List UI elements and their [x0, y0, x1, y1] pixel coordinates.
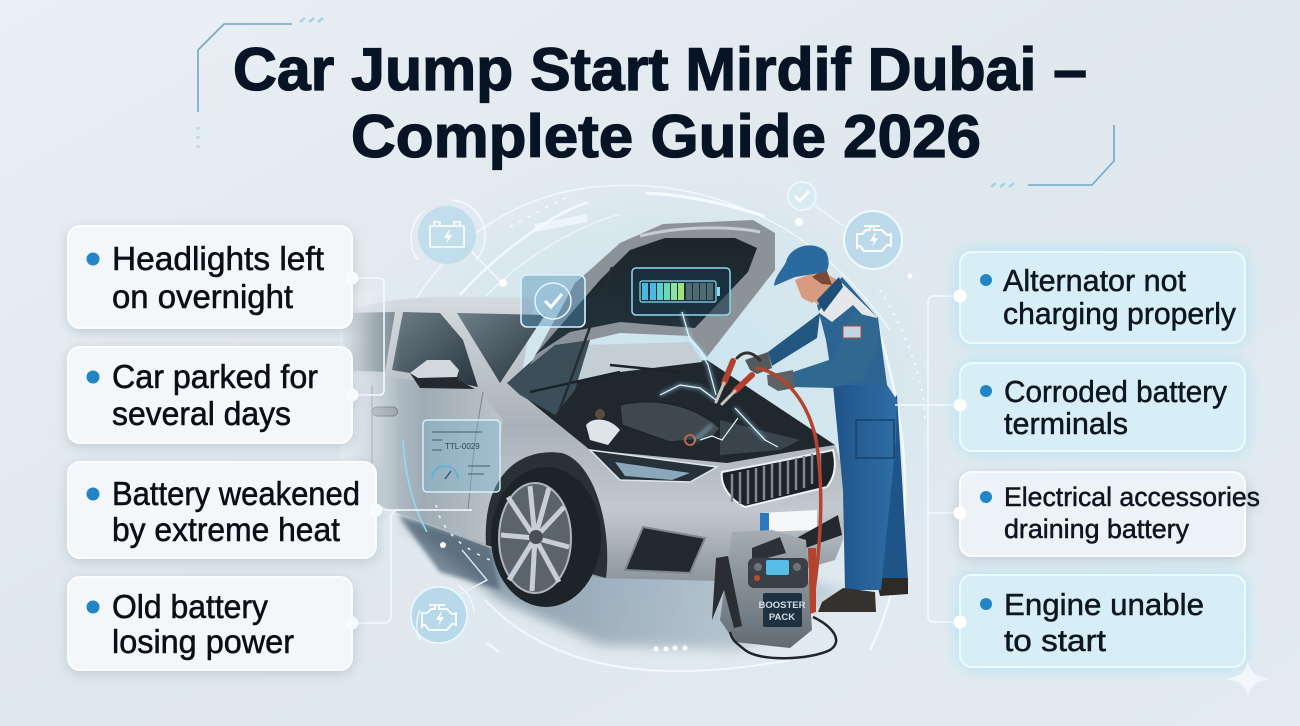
tyre [491, 467, 601, 607]
near leg [833, 385, 897, 590]
engine cover [620, 402, 720, 442]
cap [774, 245, 829, 286]
sill shadow [398, 515, 500, 590]
car [340, 220, 850, 650]
icon: sparkle [1226, 660, 1270, 698]
grille bars [732, 453, 820, 504]
title [233, 36, 1087, 170]
booster pack: PACK [769, 612, 795, 623]
torso [817, 277, 887, 385]
title: Car Jump Start Mirdif Dubai – [233, 36, 1087, 103]
panel: accessories: draining battery [1004, 514, 1189, 544]
dark hood glass [507, 340, 590, 415]
panel: corroded [954, 363, 1245, 451]
dashboard hud panel: TTL-0029 [445, 442, 480, 451]
booster pack [712, 530, 836, 658]
panel: headlights: on overnight [112, 278, 293, 315]
panel: engine unable [954, 575, 1245, 667]
door seam [372, 385, 483, 510]
door handle [372, 407, 398, 416]
open hood [530, 220, 775, 365]
panel: heat: by extreme heat [112, 511, 340, 548]
title frame: top left bracket [198, 18, 323, 148]
red handle [808, 548, 816, 614]
panel: heat [68, 462, 382, 558]
collar [817, 277, 843, 312]
mechanic [745, 245, 908, 612]
panel: accessories [954, 472, 1260, 556]
booster pack: BOOSTER [759, 600, 806, 611]
floor shadow [400, 520, 850, 650]
connector lines right [895, 296, 960, 622]
rim [499, 483, 571, 593]
title: Complete Guide 2026 [351, 103, 981, 170]
hood highlight [640, 228, 760, 236]
sleeve badge [843, 326, 861, 338]
connector lines left [352, 278, 472, 623]
far leg and boot [870, 395, 908, 580]
icon: engine warning badge bottom [411, 542, 487, 643]
panel: old battery [68, 577, 358, 670]
prop rod [557, 267, 612, 417]
icon: engine warning badge top right [844, 211, 912, 278]
black cable [730, 617, 836, 658]
panel: corroded: terminals [1004, 406, 1128, 441]
panel: alternator: charging properly [1003, 296, 1236, 331]
headlight [590, 450, 717, 482]
far arm [768, 313, 820, 366]
title frame: bottom right bracket [991, 125, 1114, 187]
panel: engine unable: to start [1004, 623, 1106, 658]
near arm [793, 312, 879, 388]
hud traces on door [403, 440, 490, 560]
panel: accessories: Electrical accessories [1004, 482, 1260, 512]
mirror [410, 360, 475, 389]
panel: alternator: Alternator not [1003, 263, 1186, 298]
lower air intake [625, 527, 705, 573]
hud arcs around the car [415, 185, 925, 671]
central glow [320, 140, 1000, 660]
hair [812, 268, 832, 285]
spokes [501, 486, 569, 591]
pack label [763, 593, 802, 627]
number plate [760, 510, 817, 532]
near boot [818, 588, 876, 612]
neck [808, 274, 838, 305]
coolant reservoir [586, 420, 620, 445]
battery hud on hood [632, 268, 730, 315]
far glove [745, 352, 772, 374]
near glove [767, 370, 795, 391]
panel: parked [68, 347, 358, 443]
face [795, 268, 829, 303]
pocket [856, 420, 894, 458]
dashboard hud panel [423, 420, 500, 492]
hood inner panel [535, 238, 757, 355]
clamps on pack [712, 556, 742, 628]
windshield [457, 313, 545, 383]
panel: corroded: Corroded battery [1004, 374, 1227, 409]
engine bay [510, 360, 835, 463]
panel: headlights: Headlights left [112, 240, 324, 277]
panel: engine unable: Engine unable [1004, 587, 1204, 622]
shoulder panel [818, 283, 877, 330]
left fade [340, 290, 400, 530]
car body [345, 297, 845, 582]
lightning core [660, 312, 778, 447]
panel: old battery: Old battery [112, 588, 268, 625]
light windshield under hood [565, 342, 702, 385]
panel: parked: Car parked for [112, 358, 318, 395]
jumper cables [716, 353, 821, 604]
icon: battery badge [411, 200, 507, 287]
small dots [654, 646, 688, 652]
door panels [345, 372, 503, 545]
side window [392, 312, 478, 387]
lightning sparks [660, 312, 765, 440]
wheel arch [486, 452, 607, 578]
panel: old battery: losing power [112, 623, 294, 660]
check hud panel [521, 275, 585, 327]
icon: small check badge [788, 182, 845, 227]
panel: heat: Battery weakened [112, 475, 360, 512]
panel: parked: several days [112, 395, 291, 432]
wiper blades [530, 365, 680, 392]
panel: alternator [954, 252, 1245, 343]
rear window [342, 312, 395, 372]
panel: headlights [68, 226, 358, 328]
grille [722, 450, 835, 507]
